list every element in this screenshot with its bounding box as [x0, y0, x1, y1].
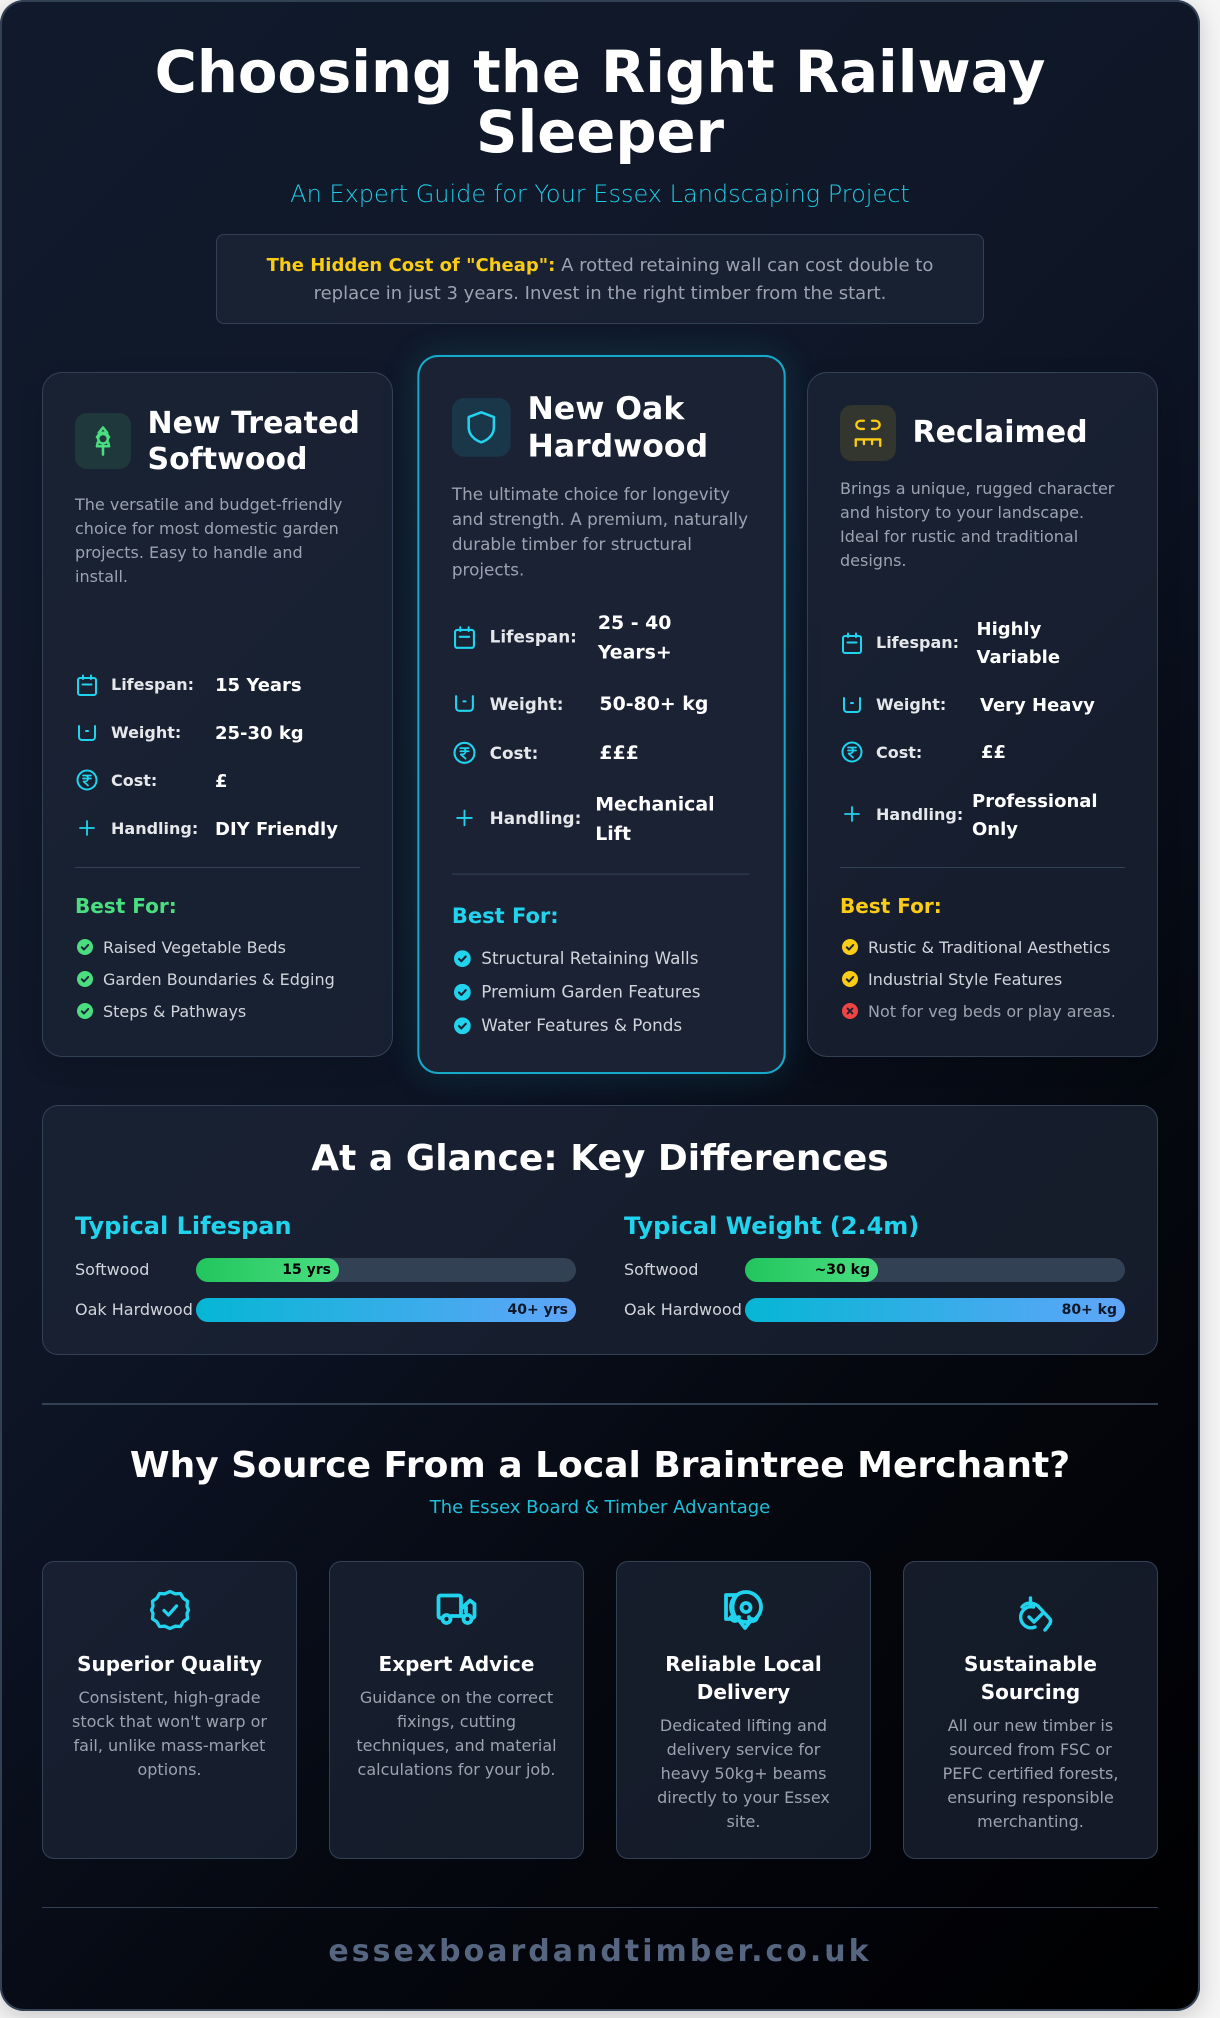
footer: website: essexboardandtimber.co.uk — [328, 1934, 872, 1969]
icon: handling — [79, 820, 95, 836]
label: handling: Handling: — [876, 805, 963, 824]
bar: softwood weight — [745, 1258, 1125, 1282]
value: lifespan: Years+ — [597, 642, 671, 664]
panel: at a glance — [42, 1105, 1158, 1355]
description: and strength. A premium, naturally — [451, 509, 748, 529]
heading: Sourcing — [981, 1680, 1080, 1704]
icon: weight — [843, 697, 861, 713]
heading — [665, 1652, 822, 1704]
description: designs. — [840, 550, 906, 570]
panel: new treated softwood — [42, 372, 393, 1057]
panel: reclaimed — [807, 372, 1158, 1057]
heading: New Treated — [148, 406, 360, 440]
description: install. — [75, 566, 128, 586]
icon: calendar — [842, 632, 862, 654]
check icon — [842, 939, 858, 955]
list item: Water Features & Ponds — [481, 1015, 682, 1035]
heading: Hardwood — [527, 428, 708, 465]
value: weight: 25-30 kg — [215, 722, 304, 744]
description: The versatile and budget-friendly — [75, 494, 342, 514]
description — [451, 484, 748, 580]
best for heading: Best For: — [451, 902, 558, 928]
description: The ultimate choice for longevity — [451, 484, 729, 504]
description: projects. — [451, 560, 524, 580]
panel: expert advice — [329, 1561, 584, 1859]
list item: Garden Boundaries & Edging — [103, 970, 335, 988]
text: Dedicated lifting and — [660, 1716, 827, 1735]
subtitle: An Expert Guide for Your Essex Landscaping Project — [290, 180, 910, 208]
list item: Not for veg beds or play areas. — [868, 1002, 1116, 1020]
label: cost: Cost: — [489, 743, 538, 763]
icon: weight — [78, 725, 96, 741]
description: Brings a unique, rugged character — [840, 478, 1114, 498]
title — [155, 38, 1045, 166]
value: handling: Only — [972, 819, 1018, 840]
panel: sustainable sourcing — [903, 1561, 1158, 1859]
icon: delivery — [724, 1590, 763, 1630]
icon: cost — [842, 742, 862, 762]
chart heading: weight: Typical Weight (2.4m) — [624, 1212, 919, 1240]
value: lifespan: 15 Years — [215, 675, 302, 696]
label: weight: Weight: — [489, 694, 563, 713]
description: Ideal for rustic and traditional — [840, 526, 1078, 546]
icon: handling — [844, 806, 860, 822]
text: calculations for your job. — [358, 1760, 555, 1779]
icon: cost — [453, 742, 476, 764]
heading: Delivery — [697, 1680, 790, 1704]
heading: Reliable Local — [665, 1652, 822, 1676]
description: and history to your landscape. — [840, 502, 1084, 522]
icon: calendar — [77, 674, 97, 696]
callout text: replace in just 3 years. Invest in the right timber from the start. — [314, 283, 886, 304]
label: cost: Cost: — [876, 742, 922, 762]
heading: Superior Quality — [77, 1652, 262, 1676]
icon: weight — [455, 695, 474, 712]
list item: Steps & Pathways — [103, 1002, 246, 1020]
icon: tree — [75, 413, 131, 469]
value: lifespan: 25 - 40 — [597, 612, 671, 634]
check icon — [454, 1017, 471, 1034]
bar: oak lifespan: 40+ yrs — [508, 1302, 568, 1318]
list item: Industrial Style Features — [868, 970, 1062, 988]
text: sourced from FSC or — [949, 1740, 1112, 1759]
section heading: At a Glance: Key Differences — [311, 1138, 889, 1179]
heading — [527, 391, 708, 465]
label: cost: Cost: — [111, 770, 157, 790]
text: ensuring responsible — [947, 1788, 1114, 1807]
value: handling: DIY Friendly — [215, 819, 338, 840]
bar: softwood lifespan: 15 yrs — [282, 1262, 331, 1278]
icon: sustainable — [1019, 1596, 1052, 1632]
check icon — [454, 950, 471, 967]
bar label: Softwood — [624, 1260, 698, 1279]
bar: oak lifespan — [196, 1298, 576, 1322]
check icon — [77, 1003, 93, 1019]
best for heading: Best For: — [840, 894, 942, 918]
section heading: why local: Why Source From a Local Braintree Merchant? — [130, 1445, 1070, 1486]
icon: truck — [436, 1594, 476, 1625]
check icon — [77, 939, 93, 955]
value: lifespan: Variable — [976, 647, 1060, 668]
icon: cost — [76, 770, 98, 790]
label: weight: Weight: — [111, 722, 181, 742]
cross icon — [842, 1003, 858, 1019]
value: weight: 50-80+ kg — [599, 693, 708, 715]
value: cost: £ — [215, 770, 228, 792]
bar: softwood lifespan — [196, 1258, 576, 1282]
title: Sleeper — [476, 98, 724, 166]
value: handling: Mechanical — [595, 794, 714, 816]
value: handling — [972, 790, 1098, 840]
value: handling — [595, 794, 714, 845]
heading: Sustainable — [964, 1652, 1097, 1676]
icon: calendar — [454, 626, 475, 649]
bar label: Softwood — [75, 1260, 149, 1279]
panel: reliable local delivery — [616, 1561, 871, 1859]
value: handling: Professional — [972, 790, 1098, 812]
description: projects. Easy to handle and — [75, 542, 303, 562]
value: lifespan: Highly — [976, 619, 1041, 640]
text — [356, 1688, 557, 1779]
label: lifespan: Lifespan: — [489, 627, 576, 647]
heading: Softwood — [148, 442, 308, 476]
title: Choosing the Right Railway — [155, 38, 1045, 106]
text: options. — [137, 1760, 202, 1779]
icon: handling — [456, 810, 473, 826]
value: cost: ££ — [981, 742, 1006, 763]
list item: Premium Garden Features — [481, 982, 700, 1002]
text: directly to your Essex — [657, 1788, 830, 1807]
description — [74, 494, 342, 586]
bar: oak weight: 80+ kg — [1062, 1302, 1117, 1318]
heading: Reclaimed — [912, 415, 1088, 450]
bar label: Oak Hardwood — [624, 1300, 742, 1319]
text: All our new timber is — [948, 1716, 1113, 1735]
callout text: The Hidden Cost of "Cheap": A rotted retaining wall can cost double to — [267, 255, 933, 276]
text: fail, unlike mass-market — [74, 1736, 265, 1755]
icon: badge check — [150, 1590, 190, 1630]
label: lifespan: Lifespan: — [876, 633, 959, 652]
bar label: Oak Hardwood — [75, 1300, 193, 1319]
panel: new oak hardwood — [417, 355, 785, 1074]
value: cost: £££ — [599, 742, 638, 764]
text — [657, 1716, 830, 1831]
label: handling: Handling: — [489, 808, 581, 828]
chart heading: lifespan: Typical Lifespan — [75, 1212, 292, 1240]
description — [840, 478, 1114, 570]
text: site. — [726, 1812, 760, 1831]
text: PEFC certified forests, — [943, 1764, 1118, 1783]
list item: Raised Vegetable Beds — [103, 938, 286, 956]
value: lifespan — [597, 612, 671, 664]
check icon — [77, 971, 93, 987]
callout: hidden cost — [216, 234, 984, 324]
label: handling: Handling: — [111, 819, 198, 838]
heading — [903, 1650, 1158, 1706]
panel: superior quality — [42, 1561, 297, 1859]
bar: oak weight — [745, 1298, 1125, 1322]
text — [72, 1688, 267, 1779]
label: lifespan: Lifespan: — [111, 675, 194, 694]
callout text — [266, 255, 933, 304]
text: stock that won't warp or — [72, 1712, 267, 1731]
best for heading: Best For: — [75, 894, 177, 918]
bar: softwood weight: ~30 kg — [815, 1262, 870, 1278]
icon: reclaimed — [840, 405, 896, 461]
description: choice for most domestic garden — [75, 518, 339, 538]
text: techniques, and material — [356, 1736, 557, 1755]
text — [903, 1714, 1158, 1834]
value: handling: Lift — [595, 823, 630, 845]
text: merchanting. — [977, 1812, 1084, 1831]
text: Consistent, high-grade — [78, 1688, 261, 1707]
text: heavy 50kg+ beams — [661, 1764, 826, 1783]
heading: New Oak — [527, 391, 684, 427]
heading: Expert Advice — [379, 1652, 534, 1676]
label: weight: Weight: — [876, 694, 946, 714]
description: durable timber for structural — [451, 534, 691, 554]
value: lifespan — [976, 619, 1060, 668]
heading — [148, 406, 360, 476]
icon: shield — [451, 398, 510, 457]
list item: Structural Retaining Walls — [481, 948, 698, 968]
value: weight: Very Heavy — [980, 694, 1095, 716]
list item: Rustic & Traditional Aesthetics — [868, 938, 1110, 956]
text: delivery service for — [667, 1740, 820, 1759]
check icon — [454, 984, 471, 1001]
section subheading: The Essex Board & Timber Advantage — [430, 1497, 770, 1518]
check icon — [842, 971, 858, 987]
text: fixings, cutting — [397, 1712, 516, 1731]
text: Guidance on the correct — [360, 1688, 553, 1707]
